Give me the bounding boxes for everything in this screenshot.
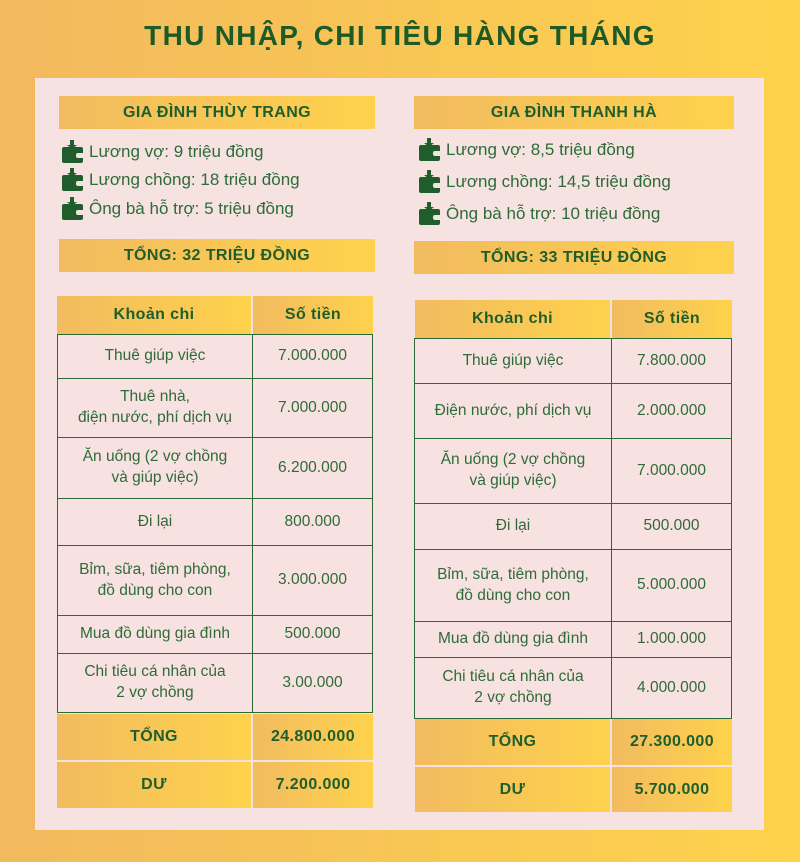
table left: Mua đồ dùng gia đình [80,625,230,642]
table left: 3.000.000 [278,571,347,588]
table left: DƯ [141,776,167,793]
table left: 3.00.000 [282,674,343,691]
table left: Thuê nhà, [120,388,190,405]
table right: Ăn uống (2 vợ chồng [441,451,585,468]
table left: Bỉm, sữa, tiêm phòng, [79,561,231,578]
table right: Khoản chi [472,310,553,327]
table right: Thuê giúp việc [463,352,563,369]
table left: 500.000 [284,625,341,642]
income list: Lương vợ: 8,5 triệu đồng [446,140,635,159]
panel: main [35,78,764,830]
table right: 27.300.000 [630,733,714,750]
table right: 5.000.000 [637,576,706,593]
table left: 24.800.000 [271,728,355,745]
table left: Thuê giúp việc [105,347,205,364]
income list: Lương chồng: 14,5 triệu đồng [446,172,671,191]
table right: và giúp việc) [469,472,556,489]
table right: 4.000.000 [637,679,706,696]
total income [59,239,375,272]
table right: Bỉm, sữa, tiêm phòng, [437,566,589,583]
table right: 7.800.000 [637,352,706,369]
table left: Ăn uống (2 vợ chồng [83,448,227,465]
table right: Số tiền [644,310,700,327]
table left: Khoản chi [114,306,194,323]
table right: 7.000.000 [637,462,706,479]
table right: đồ dùng cho con [456,586,570,604]
table left: đồ dùng cho con [98,582,212,598]
table left: Số tiền [285,306,341,323]
panel: right family [414,96,734,812]
table left: 2 vợ chồng [116,684,194,701]
heading: Gia đình Thanh Hà: GIA ĐÌNH THANH HÀ [491,104,657,121]
table right [414,300,732,812]
table left: 7.000.000 [278,347,347,364]
heading: Gia đình Thanh Hà [414,96,734,129]
table right: 5.700.000 [635,781,709,798]
heading: Gia đình Thùy Trang [59,96,375,129]
panel: left family [57,96,375,808]
heading: Gia đình Thùy Trang: GIA ĐÌNH THÙY TRANG [123,104,311,121]
table right: 2.000.000 [637,402,706,419]
table right: TỔNG [489,733,536,750]
table left: 7.000.000 [278,399,347,416]
table right: Điện nước, phí dịch vụ [435,402,591,419]
total income: TỔNG: 32 TRIỆU ĐỒNG [124,247,310,264]
table left: và giúp việc) [111,469,198,486]
table left: 800.000 [284,513,341,530]
table right: Mua đồ dùng gia đình [438,630,588,647]
table left: 6.200.000 [278,459,347,476]
income list [419,138,671,225]
table left: Chi tiêu cá nhân của [84,663,226,680]
total income: TỔNG: 33 TRIỆU ĐỒNG [481,249,667,266]
title: THU NHẬP, CHI TIÊU HÀNG THÁNG [144,20,656,51]
table right: Đi lại [496,517,530,534]
income list: Lương chồng: 18 triệu đồng [89,170,300,189]
table left: Đi lại [138,513,172,530]
table left: TỔNG [130,728,178,745]
table left [57,296,373,808]
income list [62,140,300,220]
income list: Ông bà hỗ trợ: 5 triệu đồng [89,199,294,218]
table right: 500.000 [643,517,700,534]
table right: Chi tiêu cá nhân của [442,668,584,685]
table left: 7.200.000 [276,776,350,793]
table right: 1.000.000 [637,630,706,647]
table left: điện nước, phí dịch vụ [78,409,232,426]
table right: 2 vợ chồng [474,689,552,706]
table right: DƯ [500,781,525,798]
income list: Ông bà hỗ trợ: 10 triệu đồng [446,204,660,223]
total income [414,241,734,274]
income list: Lương vợ: 9 triệu đồng [89,142,264,161]
